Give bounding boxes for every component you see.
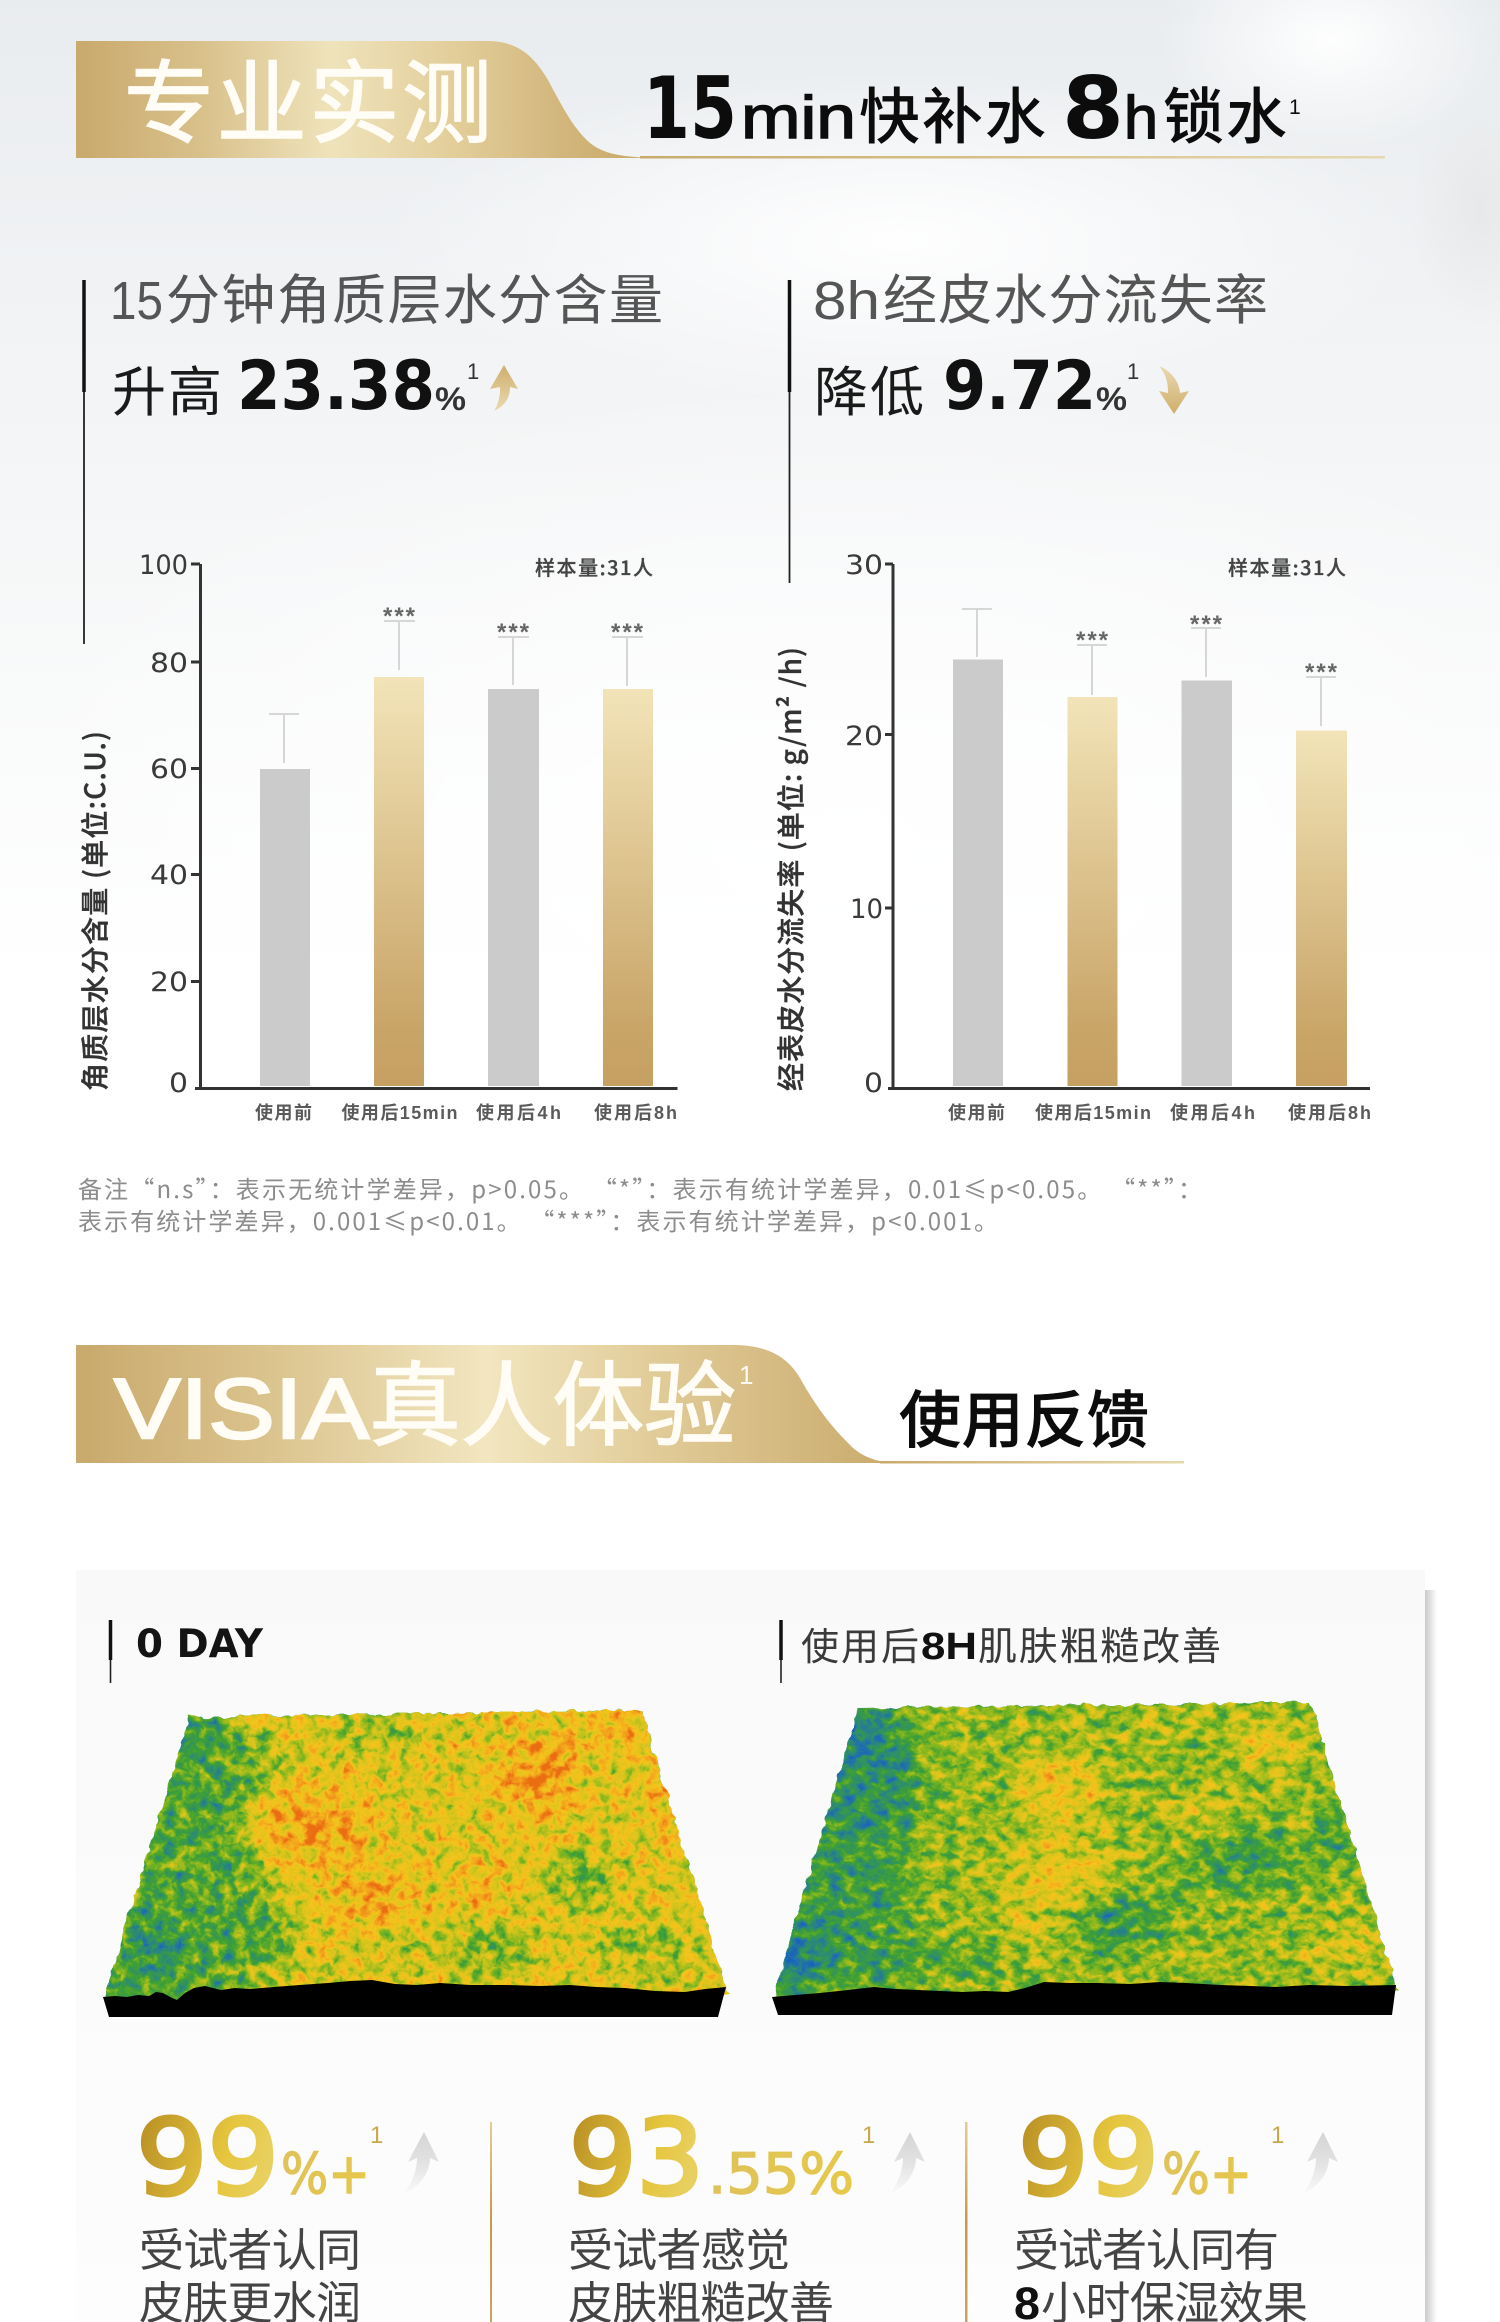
divider: [490, 2122, 492, 2322]
stat number: 93: [569, 2097, 704, 2219]
right metric heading: 9.72: [943, 347, 1096, 426]
y axis ticks: 40: [150, 860, 188, 891]
right metric heading: 经皮水分流失率: [883, 256, 1268, 335]
y axis title: 经表皮水分流失率 (单位: g/m² /h): [770, 647, 810, 1091]
banner rule: [640, 156, 1385, 158]
y axis ticks: 100: [139, 550, 188, 581]
banner subtitle: 15min快补水 8h锁水: 8: [1062, 59, 1124, 159]
stat caption: 受试者认同: [139, 2214, 361, 2279]
banner subtitle: 15min快补水 8h锁水: min: [741, 84, 856, 151]
x labels: 使用后8h: [1288, 1103, 1371, 1123]
banner subtitle: 使用反馈: 使用反馈: [899, 1370, 1149, 1460]
x labels: [948, 1103, 1371, 1123]
panel label: 使用后8H肌肤粗糙改善: [781, 1616, 1221, 1683]
significance stars: ***: [1076, 627, 1110, 654]
y axis ticks: 20: [845, 721, 883, 752]
sample size: 样本量:31人: [535, 552, 653, 581]
stat caption: 受试者感觉: [568, 2214, 790, 2279]
accent line: [788, 280, 791, 392]
right metric heading: 1: [1127, 359, 1139, 384]
left metric heading: [84, 256, 663, 644]
x labels: 使用后4h: [476, 1103, 561, 1123]
icon: gray up arrow: [891, 2132, 925, 2193]
metric title: 8h: [813, 271, 880, 331]
y axis ticks: 10: [850, 894, 883, 925]
footnote: [78, 1170, 1202, 1237]
y axis ticks: [139, 550, 188, 1099]
panel label: 使用后8H肌肤粗糙改善: 使用后: [801, 1616, 919, 1671]
stat: 99%+ 8h moisture: %+: [1162, 2142, 1252, 2207]
banner subtitle: 15min快补水 8h锁水: h: [1124, 84, 1158, 151]
x labels: 使用后4h: [1170, 1103, 1255, 1123]
panel background: [76, 1570, 1425, 2322]
black base: [103, 1980, 726, 2017]
stat: 99%+ hydrated: %+: [281, 2142, 370, 2207]
icon: gray up arrow: [405, 2132, 439, 2193]
axes: [191, 564, 678, 1089]
accent line: [82, 280, 86, 392]
footnote: 备注“n.s”：表示无统计学差异，p>0.05。 “*”：表示有统计学差异，0.01≤p<0.05。 “**”：: [78, 1170, 1202, 1205]
panel shadow: [1425, 1590, 1437, 2322]
significance stars: ***: [497, 619, 531, 646]
section banner: VISIA真人体验: [76, 1332, 1184, 1465]
panel label: 0 DAY: 0 DAY: [136, 1622, 264, 1667]
left metric heading: %: [435, 381, 466, 417]
metric value: 降低: [814, 348, 924, 427]
panel label: 使用后8H肌肤粗糙改善: 肌肤粗糙改善: [978, 1616, 1221, 1672]
right metric heading: [790, 256, 1268, 583]
banner shape: [76, 1345, 895, 1463]
banner title: VISIA: [114, 1362, 369, 1457]
significance stars: ***: [383, 603, 417, 630]
y axis ticks: 20: [150, 967, 188, 998]
bars: [260, 769, 310, 1086]
stat number: 99: [136, 2097, 279, 2219]
significance stars: ***: [1305, 659, 1339, 686]
metric title: 15: [110, 271, 163, 331]
y axis ticks: 0: [169, 1068, 188, 1099]
divider: [965, 2122, 968, 2322]
heat surface: [776, 1700, 1399, 1997]
x labels: 使用后15min: [1035, 1103, 1151, 1123]
section banner: VISIA真人体验: 真人体验: [369, 1332, 736, 1465]
section banner: VISIA真人体验: 1: [739, 1360, 753, 1390]
right metric heading: %: [1096, 381, 1127, 417]
error bars: [269, 621, 643, 763]
banner subtitle: 15min快补水 8h锁水: 快补水: [859, 67, 1046, 156]
stat: 93.55% roughness: [568, 2097, 925, 2322]
icon: gold down arrow: [1159, 366, 1189, 414]
axes: [885, 564, 1370, 1089]
panel label: 使用后8H肌肤粗糙改善: 8H: [921, 1626, 977, 1668]
bar chart: 角质层水分含量: [74, 550, 678, 1123]
banner subtitle: 15min快补水 8h锁水: 1: [1289, 96, 1301, 119]
x labels: 使用后15min: [342, 1103, 458, 1123]
3D skin map: 0 day: [103, 1708, 730, 2017]
banner rule: [880, 1461, 1184, 1464]
stat: 99%+ hydrated: [136, 2097, 439, 2322]
bars: [953, 660, 1003, 1086]
stat: 99%+ hydrated: 1: [370, 2122, 383, 2149]
banner title: 专业实测: [124, 31, 492, 161]
banner shape: [76, 41, 655, 158]
left metric heading: 1: [467, 359, 479, 384]
significance stars: [383, 603, 645, 646]
bar chart: 经表皮水分流失率: [770, 550, 1371, 1123]
banner subtitle: 15min快补水 8h锁水: 15: [643, 59, 737, 159]
left metric heading: 23.38: [237, 347, 435, 426]
y axis ticks: 60: [150, 754, 188, 785]
icon: gold up arrow: [490, 365, 518, 411]
y axis ticks: 80: [150, 648, 188, 679]
significance stars: ***: [611, 619, 645, 646]
metric value: 升高: [112, 348, 222, 427]
panel: VISIA results: [76, 1570, 1437, 2322]
y axis ticks: 0: [864, 1068, 883, 1099]
significance stars: ***: [1190, 611, 1224, 638]
section banner: 专业实测: [76, 31, 1385, 161]
stat caption: 受试者认同有: [1014, 2214, 1279, 2279]
black base: [772, 1982, 1396, 2015]
sample size: 样本量:31人: [1228, 552, 1346, 581]
x labels: 使用前: [255, 1103, 312, 1123]
x labels: 使用后8h: [594, 1103, 677, 1123]
stat: 93.55% roughness: .55%: [708, 2142, 854, 2207]
y axis ticks: 30: [845, 550, 883, 581]
footnote: 表示有统计学差异，0.001≤p<0.01。 “***”：表示有统计学差异，p<0.001。: [78, 1202, 998, 1237]
3D skin map: after 8h: [760, 1690, 1410, 2015]
significance stars: [1076, 611, 1339, 686]
stat: 99%+ 8h moisture: 1: [1271, 2122, 1284, 2149]
icon: gray up arrow: [1304, 2132, 1338, 2193]
stat number: 99: [1018, 2097, 1159, 2219]
heat surface: [106, 1708, 730, 2000]
x labels: 使用前: [948, 1103, 1005, 1123]
y axis ticks: [845, 550, 883, 1099]
left metric heading: 分钟角质层水分含量: [166, 256, 663, 335]
banner subtitle: 15min快补水 8h锁水: 锁水: [1163, 67, 1287, 156]
banner subtitle: 15min快补水 8h锁水: [643, 59, 1301, 159]
y axis title: 角质层水分含量 (单位:C.U.): [74, 731, 114, 1091]
x labels: [255, 1103, 677, 1123]
error bars: [962, 609, 1336, 726]
stat: 93.55% roughness: 1: [862, 2122, 875, 2149]
stat: 99%+ 8h moisture: [1014, 2097, 1338, 2322]
